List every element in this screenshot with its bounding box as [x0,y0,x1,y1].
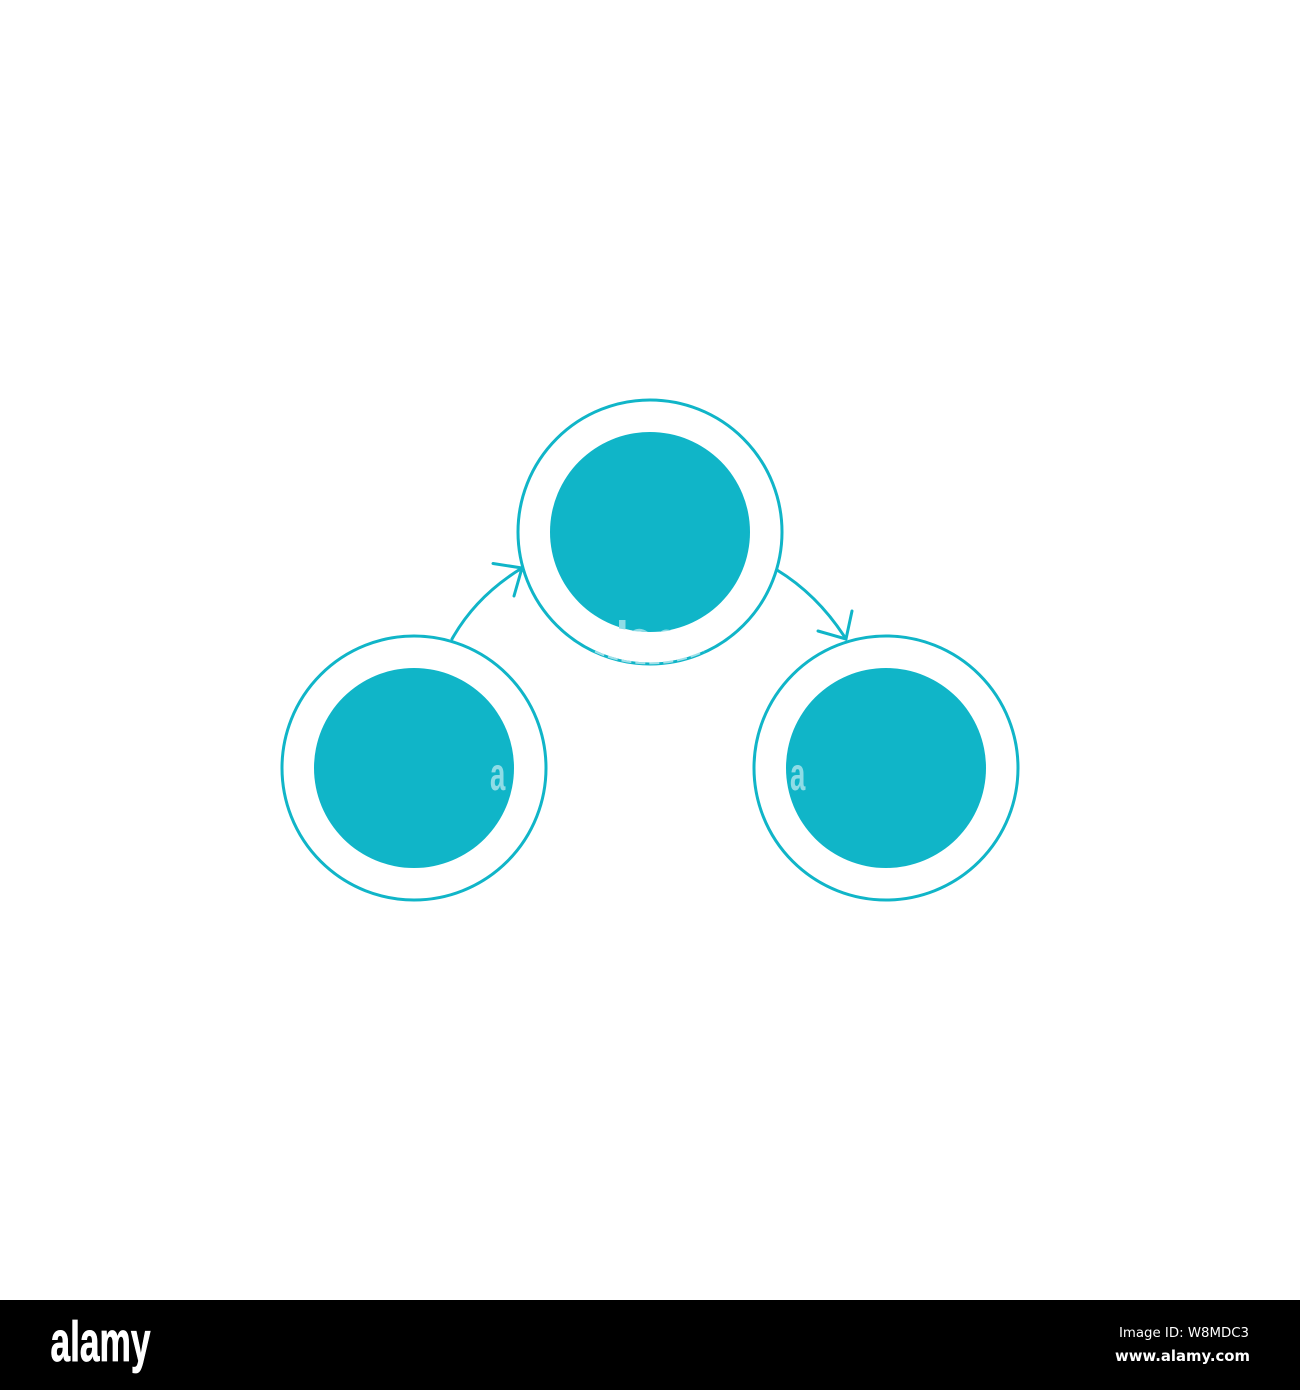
node: right circle [754,636,1018,900]
arrow: top circle to right circle [777,570,852,639]
arrow: left circle to top circle [452,564,522,639]
watermark fragment: left circle: a [490,750,506,801]
watermark fragment: top circle [619,620,671,632]
watermark strip: top circle ring [595,652,704,663]
watermark fragment: right circle: a [790,750,806,801]
footer bar [0,1300,1300,1390]
image id: Image ID: W8MDC3 [1119,1325,1249,1341]
website: www.alamy.com [1115,1347,1250,1365]
node: top circle [518,400,782,664]
node: left circle [282,636,546,900]
logo: alamy: alamy [50,1310,151,1374]
